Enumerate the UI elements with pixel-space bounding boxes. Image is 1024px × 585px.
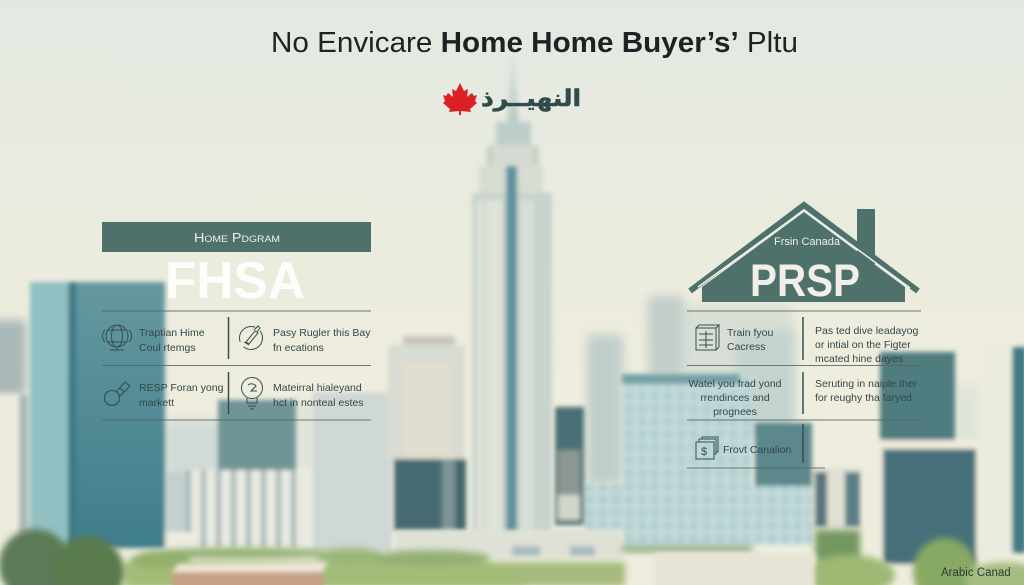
heading banner: Home Program: Home Pdgram [194, 231, 280, 245]
text: Train fyou: Train fyou [727, 327, 773, 339]
icon: key [104, 382, 130, 406]
heading: PRSP: PRSP [750, 255, 860, 306]
text: Watel you: prognees [713, 406, 757, 418]
panel: FHSA: fn ecations [273, 342, 324, 354]
heading: FHSA: FHSA [165, 252, 305, 310]
text: RESP Foran: RESP Foran yong [139, 382, 224, 394]
text: Traptian Hime: Traptian Hime [139, 327, 205, 339]
icon: light bulb [242, 378, 262, 409]
text: Pasy Rugler: Pasy Rugler this Bay [273, 327, 371, 339]
text: Frovt Canalion: Frovt Canalion [723, 444, 791, 456]
text: Material hialeyand: Mateirral hialeyand [273, 382, 362, 394]
panel: PRSP: Cacress [727, 341, 766, 353]
panel: FHSA: Coul rtemgs [139, 342, 196, 354]
panel: PRSP: mcated hine dayes [815, 353, 903, 365]
heading banner: Home Program [102, 222, 371, 252]
icon: maple leaf [443, 83, 477, 115]
panel: PRSP: or intial on the Figter [815, 339, 911, 351]
logo: maple leaf and Arabic wordmark [443, 83, 581, 115]
text: Watel you: Watel you frad yond [688, 378, 782, 390]
text: Pas ted dive: Pas ted dive leadayog [815, 325, 918, 337]
panel: PRSP [687, 205, 921, 468]
text: Watel you [688, 378, 782, 418]
panel: FHSA: markett [139, 397, 174, 409]
icon: dollar bills [696, 437, 718, 459]
footer label: Arabic Canad [941, 567, 1011, 579]
Arabic wordmark: النهيــرذ [481, 85, 581, 112]
icon: globe [102, 325, 132, 350]
title: No Envicare Home Home Buyer’s’ Pltu [271, 27, 798, 59]
text: Seruting: Seruting in naiple ther [815, 378, 918, 390]
text: Watel you: rrendinces and [700, 392, 770, 404]
house-shaped header [690, 205, 918, 306]
panel: PRSP: for reughy tha faryed [815, 392, 912, 404]
icon: building [696, 325, 719, 350]
panel: FHSA: hct in nonteal estes [273, 397, 363, 409]
text: Frsin Canada: Frsin Canada [774, 236, 841, 248]
panel: FHSA [102, 222, 371, 420]
icon: tools circle [240, 326, 262, 350]
icon: dollar bills: $ [701, 446, 707, 458]
